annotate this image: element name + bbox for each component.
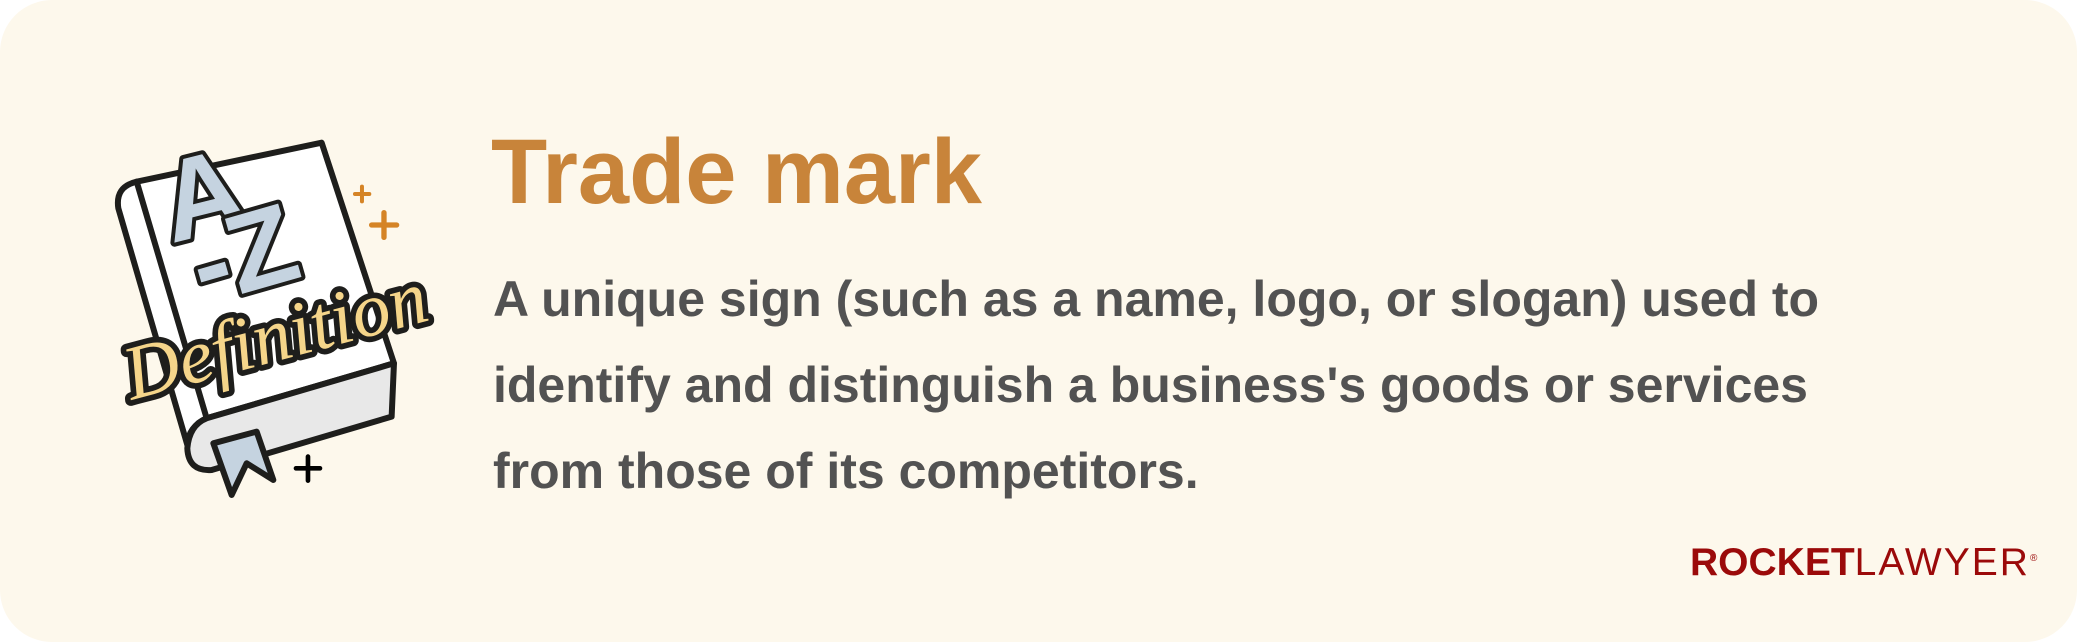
- icon: A-Z definition book: [113, 123, 436, 498]
- title: Trade mark: [491, 121, 982, 223]
- text block: definition: A unique sign (such as a name, logo, or slogan) used to: [493, 271, 1819, 327]
- logo: Rocket Lawyer: ROCKETLAWYER®: [1690, 541, 2037, 584]
- text block: definition: identify and distinguish a business's goods or services: [493, 357, 1808, 413]
- icon: A-Z definition book: -Z: [175, 179, 311, 328]
- icon: A-Z definition book: Definition: [113, 254, 436, 417]
- icon: A-Z definition book: A: [147, 123, 258, 268]
- text block: definition: [493, 271, 1819, 499]
- text block: definition: from those of its competitors.: [493, 443, 1199, 499]
